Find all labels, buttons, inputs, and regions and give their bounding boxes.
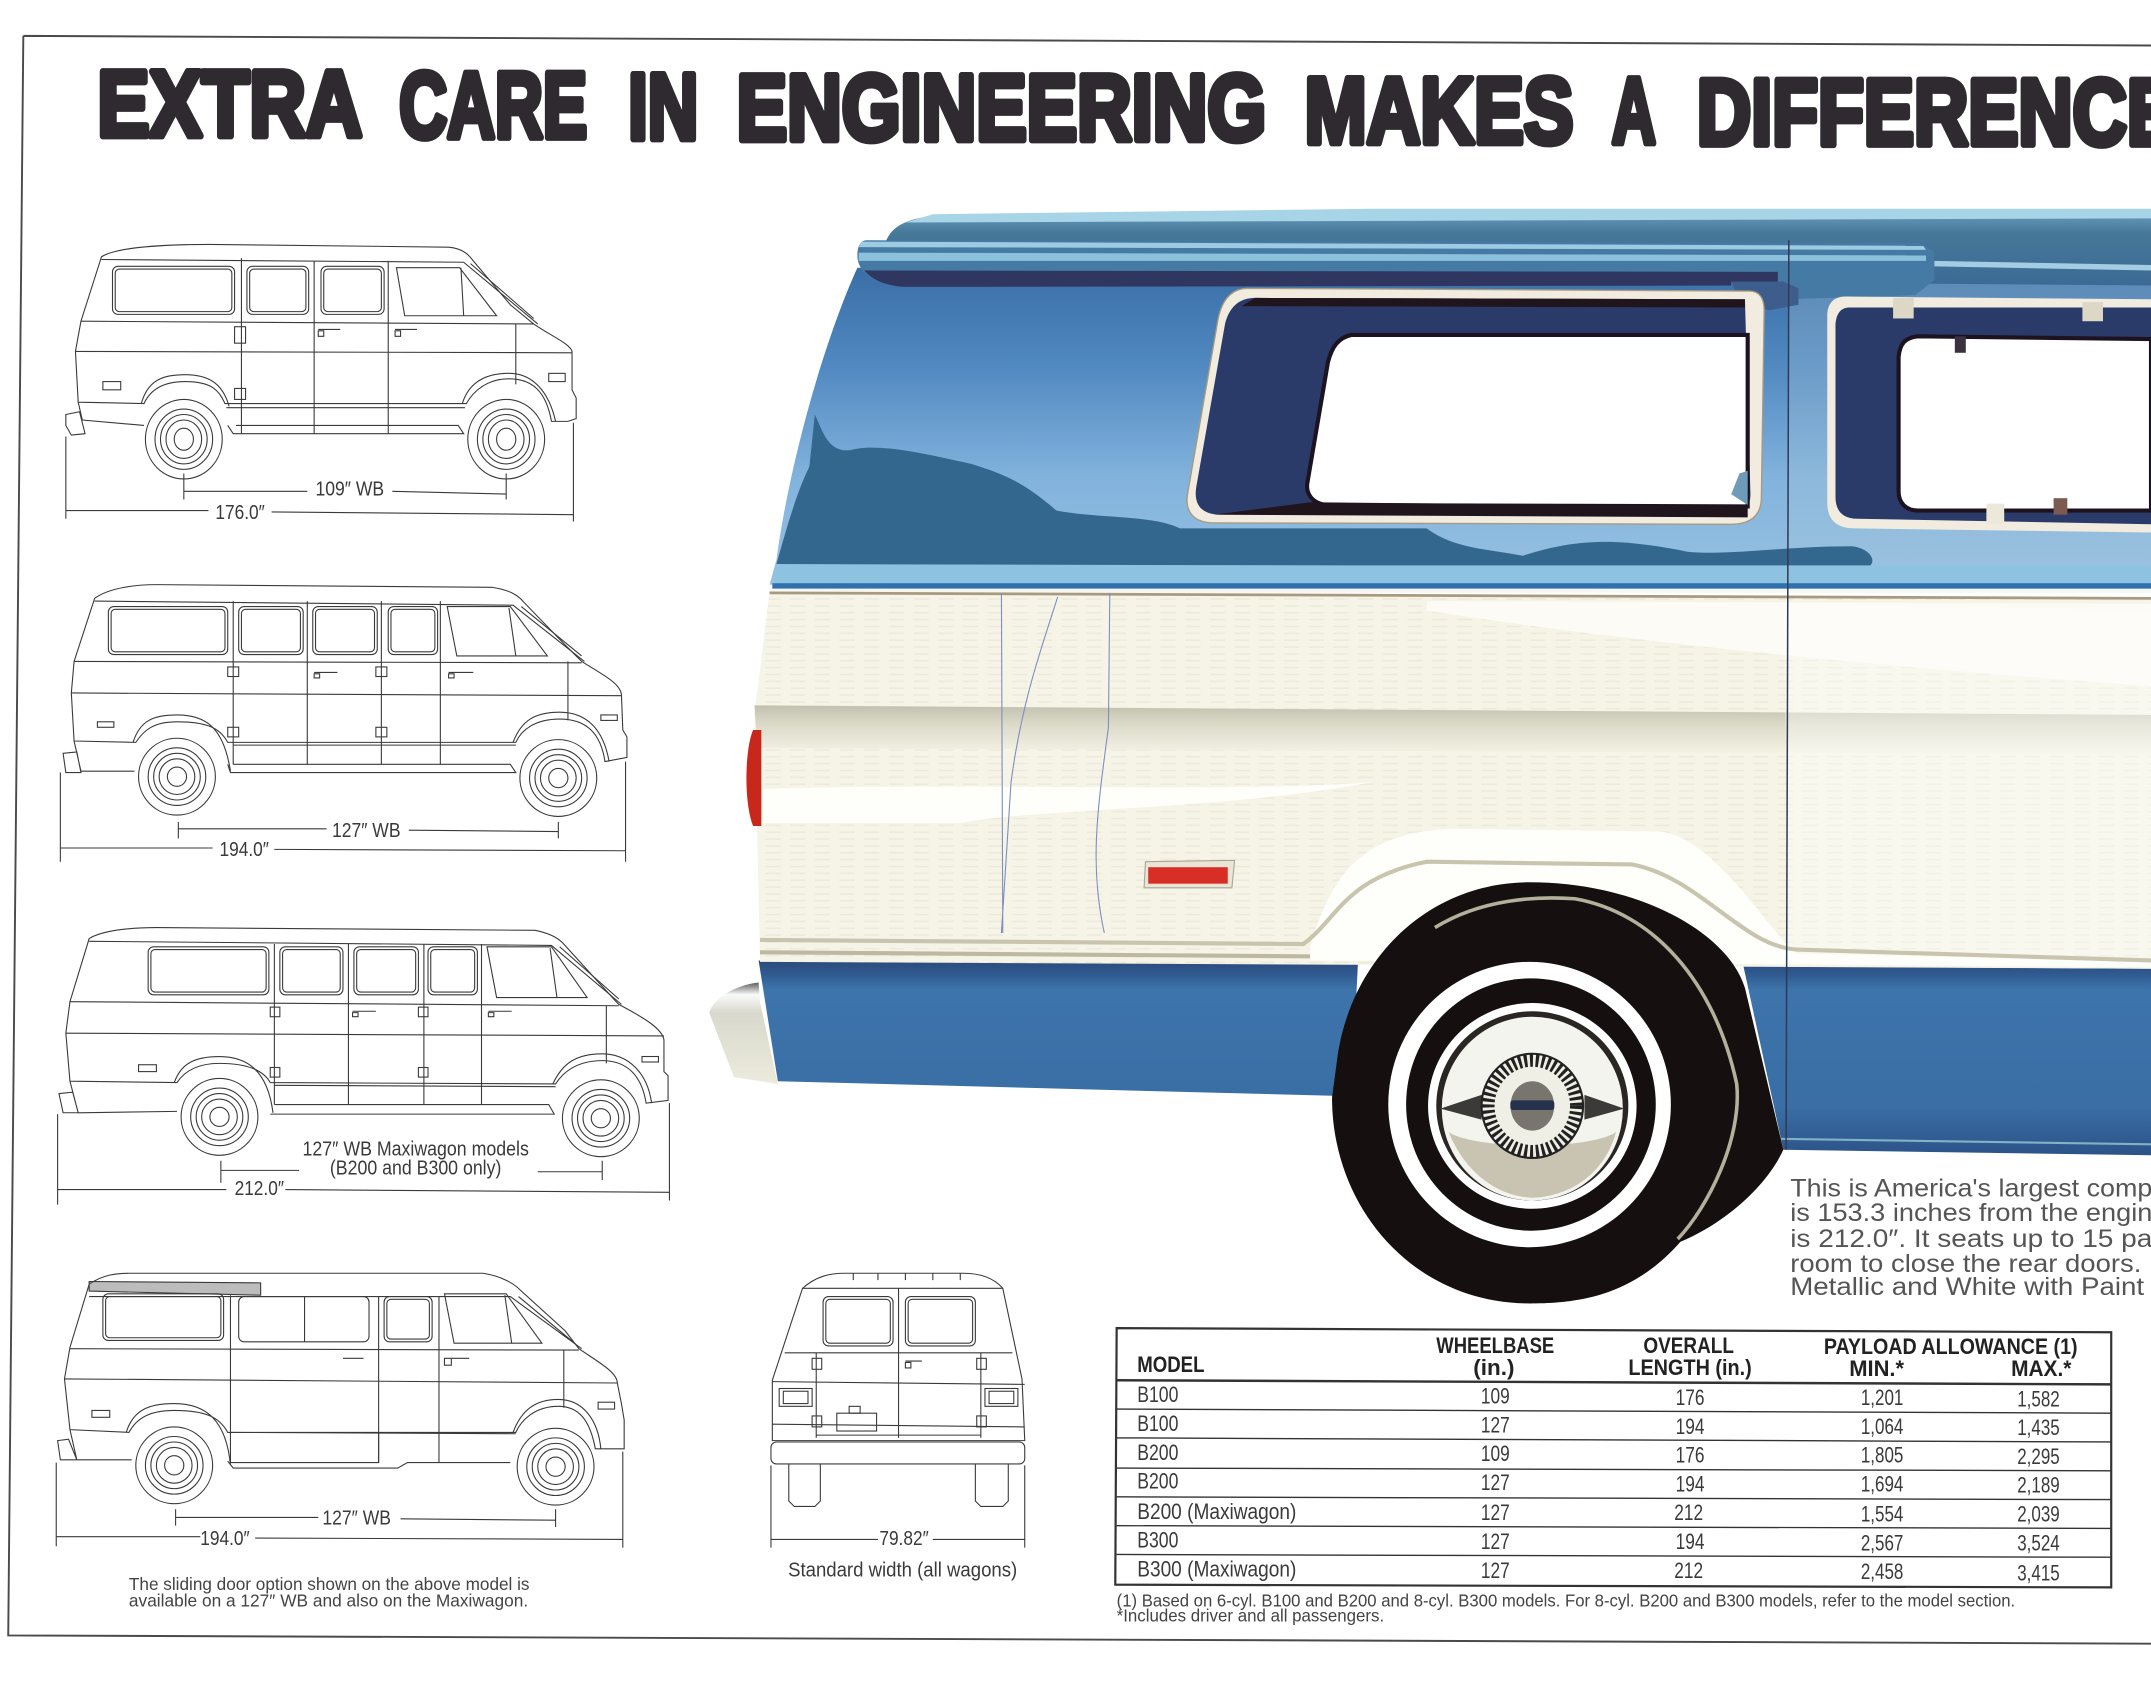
van blueprint: rear view — [771, 1273, 1025, 1581]
label: Maxiwagon caption: 127″ WB Maxiwagon models — [302, 1138, 529, 1160]
table row 6: B300 — [1137, 1528, 1178, 1553]
van 3 line art — [59, 928, 668, 1157]
table row 5 — [1137, 1499, 2060, 1527]
table row 6: 2,567 — [1861, 1530, 1903, 1555]
van blueprint: 127 WB — [60, 585, 627, 862]
rear bumper — [709, 982, 778, 1084]
table row 3: 109 — [1481, 1441, 1510, 1466]
body copy — [1790, 1174, 2151, 1301]
label: Maxiwagon caption: (B200 and B300 only) — [330, 1157, 501, 1179]
side window — [1827, 297, 2151, 532]
table row 4: 1,694 — [1861, 1471, 1903, 1496]
title: CARE — [399, 53, 587, 157]
van 3 dimensions — [58, 1103, 669, 1205]
table header: (in.) — [1473, 1355, 1514, 1380]
van cream mid body — [754, 591, 2151, 969]
table row 1: 109 — [1481, 1384, 1510, 1409]
title: MAKES — [1305, 59, 1573, 163]
table header: LENGTH (in.) — [1628, 1355, 1752, 1380]
table row 1 — [1137, 1382, 2060, 1411]
table row 4: 127 — [1481, 1470, 1510, 1495]
table row 5: 212 — [1674, 1500, 1703, 1525]
van 4 line art — [58, 1273, 624, 1505]
table grid — [1115, 1328, 2111, 1587]
label: Maxiwagon caption — [302, 1138, 529, 1179]
table row 2: 194 — [1676, 1414, 1704, 1439]
rear view line art — [771, 1273, 1025, 1506]
van blueprint: sliding door — [56, 1273, 624, 1611]
body repair lines — [1001, 593, 1110, 933]
table row 7 — [1137, 1556, 2060, 1586]
table header: MODEL — [1137, 1352, 1204, 1377]
reflection on body — [776, 415, 1872, 567]
table row 7: 212 — [1674, 1558, 1703, 1583]
title: ENGINEERING — [737, 56, 1266, 160]
rear window — [1187, 288, 1764, 524]
table row 7: 3,415 — [2017, 1561, 2060, 1586]
table row 3: B200 — [1137, 1440, 1178, 1465]
table footnotes: *Includes driver and all passengers. — [1117, 1606, 1384, 1626]
label: 79.82: 79.82″ — [879, 1528, 929, 1550]
van 4 dimensions — [56, 1452, 623, 1548]
label: 194.0: 194.0″ — [200, 1528, 250, 1550]
table row 7: 127 — [1481, 1558, 1510, 1583]
roof and drip rail — [857, 209, 2151, 310]
table row 5: 1,554 — [1861, 1502, 1903, 1527]
body copy: is 212.0″. It seats up to 15 pa — [1790, 1225, 2151, 1253]
table row 2: 1,064 — [1861, 1414, 1903, 1439]
table row 4: 2,189 — [2017, 1473, 2060, 1498]
van upper blue body — [770, 268, 2151, 591]
table header — [1137, 1333, 2078, 1381]
van 1 dimensions — [66, 423, 573, 522]
table row 2 — [1137, 1411, 2060, 1440]
van lower blue panel — [759, 960, 2151, 1155]
label: 127 WB: 127″ WB — [332, 820, 401, 842]
table header: PAYLOAD ALLOWANCE (1) — [1824, 1334, 2078, 1359]
van blueprint: 109 WB — [66, 244, 576, 524]
label: 109 WB: 109″ WB — [316, 478, 384, 500]
table row 5: 127 — [1481, 1500, 1510, 1525]
title: A — [1612, 59, 1656, 163]
sliding door note: available on a 127″ WB and also on the Maxiwagon. — [129, 1591, 528, 1611]
table row 1: 1,201 — [1861, 1385, 1903, 1410]
van 1 line art — [66, 244, 576, 479]
label: 127 WB: 127″ WB — [322, 1507, 391, 1529]
table row 6: 194 — [1676, 1529, 1704, 1554]
label: 194.0: 194.0″ — [219, 839, 269, 861]
van blueprint: Maxiwagon — [58, 928, 669, 1205]
van 2 dimensions — [60, 762, 626, 862]
spec table — [1115, 1328, 2111, 1587]
table row 3 — [1137, 1440, 2060, 1469]
table row 3: 2,295 — [2017, 1444, 2060, 1469]
table header: MAX.* — [2011, 1356, 2072, 1381]
tail light — [746, 730, 761, 826]
body copy: Metallic and White with Paint — [1790, 1273, 2144, 1301]
table row 1: 176 — [1676, 1385, 1704, 1410]
table row 1: 1,582 — [2017, 1386, 2060, 1411]
van 2 line art — [63, 585, 627, 816]
sliding door note: The sliding door option shown on the above model is — [129, 1574, 530, 1594]
table row 4: 194 — [1676, 1471, 1704, 1496]
right panel lighter tone — [1789, 281, 2151, 565]
label: 176.0: 176.0″ — [215, 502, 265, 524]
table row 6: 127 — [1481, 1529, 1510, 1554]
table footnotes — [1117, 1591, 2015, 1626]
table row 4: B200 — [1137, 1469, 1178, 1494]
body copy: is 153.3 inches from the engin — [1790, 1199, 2151, 1227]
table row 1: B100 — [1137, 1382, 1178, 1407]
rear view dimension — [771, 1465, 1025, 1548]
table row 3: 176 — [1676, 1443, 1704, 1468]
table row 2: B100 — [1137, 1411, 1178, 1436]
window belt stripes — [770, 565, 2151, 598]
table row 4 — [1137, 1469, 2060, 1498]
table row 5: 2,039 — [2017, 1502, 2060, 1527]
table row 5: B200 (Maxiwagon) — [1137, 1499, 1296, 1524]
title: IN — [628, 55, 698, 159]
table row 2: 1,435 — [2017, 1415, 2060, 1440]
table row 7: 2,458 — [1861, 1559, 1903, 1584]
body copy: room to close the rear doors. — [1790, 1250, 2141, 1278]
label: standard width: Standard width (all wagons) — [788, 1559, 1017, 1581]
title — [97, 52, 2151, 164]
title: EXTRA — [97, 52, 362, 156]
table header: WHEELBASE — [1436, 1333, 1554, 1358]
hero photo: two-tone van side — [709, 209, 2151, 1303]
door seam — [1786, 240, 1789, 1150]
rear wheel — [1332, 882, 1783, 1303]
body copy: This is America's largest comp — [1790, 1174, 2151, 1202]
label: 212.0: 212.0″ — [235, 1178, 284, 1200]
table header: MIN.* — [1849, 1356, 1905, 1381]
sliding door note — [129, 1574, 530, 1611]
side marker — [1144, 860, 1235, 888]
table row 3: 1,805 — [1861, 1443, 1903, 1468]
table header: OVERALL — [1643, 1333, 1734, 1358]
table row 6 — [1137, 1528, 2060, 1555]
table row 6: 3,524 — [2017, 1530, 2060, 1555]
rocker stripe — [1778, 1139, 2151, 1144]
table row 7: B300 (Maxiwagon) — [1137, 1556, 1296, 1581]
table row 2: 127 — [1481, 1412, 1510, 1437]
table footnotes: (1) Based on 6-cyl. B100 and B200 and 8-cyl. B300 models. For 8-cyl. B200 and B300 models, refer to the model section. — [1117, 1591, 2015, 1611]
